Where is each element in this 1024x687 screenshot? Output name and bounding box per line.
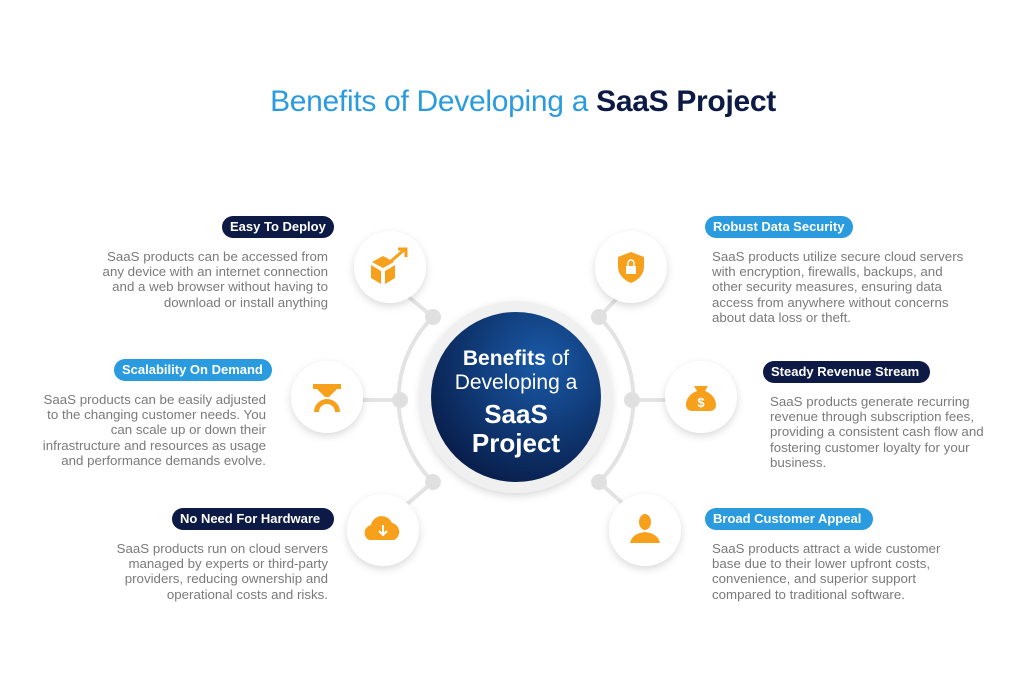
text: access from anywhere without concerns (712, 295, 948, 310)
text: and a web browser without having to (112, 279, 328, 294)
panel: revenue (763, 361, 984, 470)
text: providers, reducing ownership and (125, 571, 328, 586)
panel: data security (705, 216, 963, 325)
text: compared to traditional software. (712, 587, 905, 602)
text: Easy To Deploy (230, 219, 326, 234)
text: other security measures, ensuring data (712, 279, 942, 294)
icon: person (630, 514, 660, 543)
text: infrastructure and resources as usage (43, 438, 266, 453)
text: and performance demands evolve. (61, 453, 266, 468)
text: SaaS products generate recurring (770, 394, 970, 409)
text: SaaS products run on cloud servers (117, 541, 328, 556)
center circle (420, 301, 612, 493)
text: with encryption, firewalls, backups, and (712, 264, 943, 279)
text: Robust Data Security (713, 219, 844, 234)
text: fostering customer loyalty for your (770, 440, 970, 455)
text: Broad Customer Appeal (713, 511, 861, 526)
icon circles (291, 231, 737, 566)
text: operational costs and risks. (167, 587, 328, 602)
text: managed by experts or third-party (128, 556, 328, 571)
text: download or install anything (164, 295, 328, 310)
text: SaaS products can be easily adjusted (44, 392, 266, 407)
center circle: SaaS (484, 399, 548, 429)
center circle: Project (472, 428, 560, 458)
text: No Need For Hardware (180, 511, 320, 526)
text: SaaS products utilize secure cloud servers (712, 249, 963, 264)
panel: scalability (43, 359, 272, 468)
text: business. (770, 455, 826, 470)
text: Scalability On Demand (122, 362, 263, 377)
center circle: Benefits of (463, 347, 569, 370)
text: convenience, and superior support (712, 571, 916, 586)
panel: easy to deploy (103, 216, 334, 310)
icon: box deploy (371, 249, 406, 284)
text: can scale up or down their (111, 422, 266, 437)
icon: money bag: $ (697, 395, 705, 410)
panel: no hardware (117, 508, 334, 602)
text: base due to their lower upfront costs, (712, 556, 930, 571)
icon: money bag (686, 386, 716, 411)
center circle: Developing a (455, 371, 578, 394)
icon: shield lock (618, 252, 644, 283)
title: Benefits of Developing a SaaS Project (270, 85, 776, 118)
text: revenue through subscription fees, (770, 409, 974, 424)
text: to the changing customer needs. You (47, 407, 266, 422)
text: providing a consistent cash flow and (770, 424, 984, 439)
icon: scale (313, 384, 341, 412)
text: any device with an internet connection (103, 264, 328, 279)
text: SaaS products can be accessed from (107, 249, 328, 264)
text: Steady Revenue Stream (771, 364, 919, 379)
icon: cloud download (365, 516, 399, 540)
text: about data loss or theft. (712, 310, 851, 325)
text: SaaS products attract a wide customer (712, 541, 940, 556)
panel: customer appeal (705, 508, 940, 602)
